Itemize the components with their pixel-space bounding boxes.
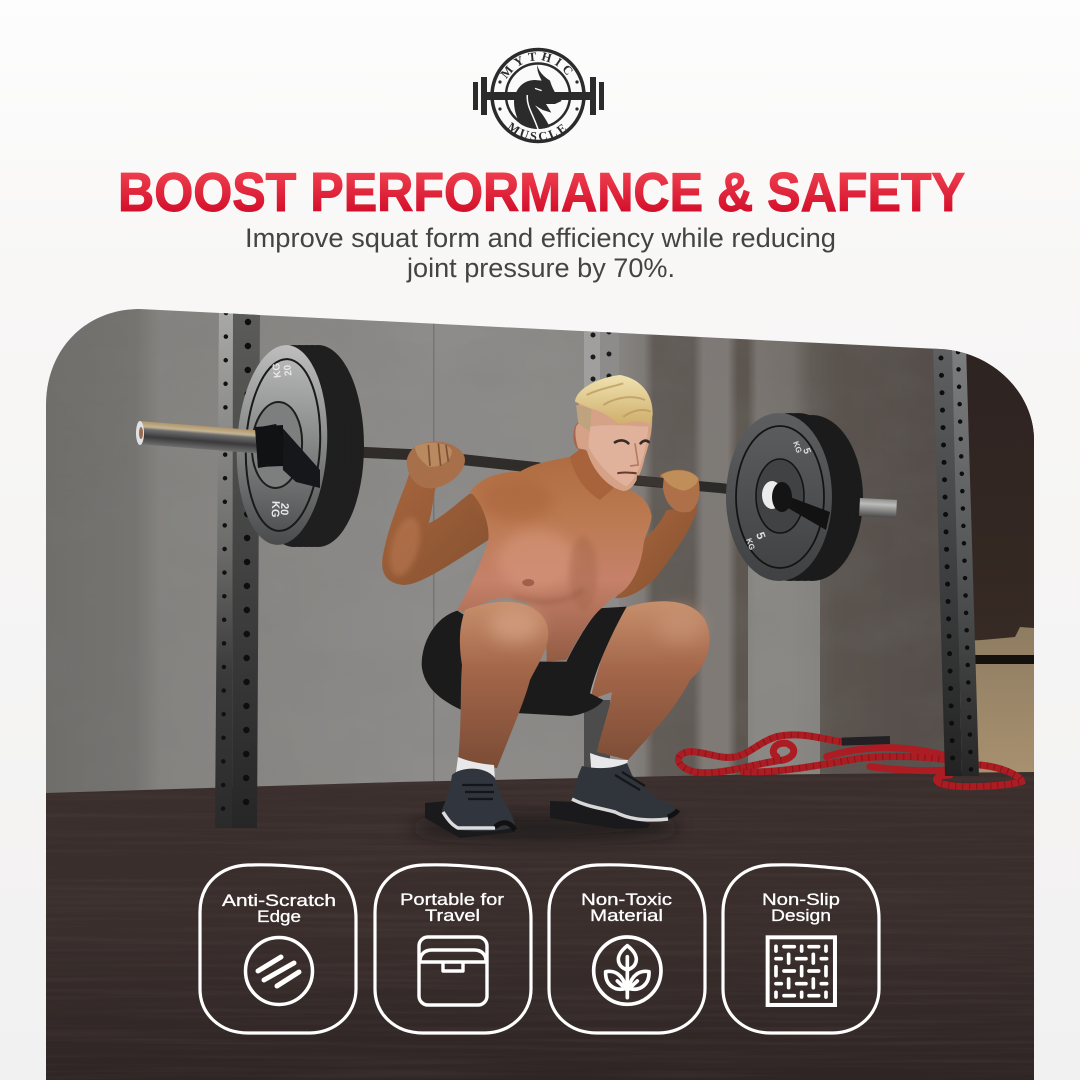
- pec underside shadow: [513, 590, 583, 602]
- neck: [570, 449, 614, 500]
- badge label: Non-Toxic: [581, 890, 673, 909]
- right weight plate 5 KG: 5: [800, 447, 813, 456]
- badge label: Travel: [425, 906, 480, 925]
- left rack upright: [215, 310, 260, 828]
- icon: circled diagonal stripes: [246, 938, 312, 1004]
- ring dots: [498, 80, 579, 111]
- barbell bar left of athlete: [355, 452, 540, 468]
- nipple: [522, 579, 534, 586]
- right weight plate 5 KG: [726, 413, 897, 581]
- right weight plate 5 KG: KG: [791, 440, 804, 454]
- face light: [588, 425, 648, 487]
- feature badge: Non-Toxic Material: [549, 865, 705, 1033]
- badge label: Material: [590, 906, 663, 925]
- chest divide shadow: [569, 537, 597, 610]
- wedge squat blocks: [425, 801, 650, 838]
- right rack upright: [933, 345, 979, 776]
- barbell plates: [473, 77, 604, 115]
- left shoe: [442, 769, 515, 831]
- right shoe: [572, 763, 678, 822]
- knee highlight: [489, 607, 541, 643]
- right leg: [590, 601, 710, 760]
- right weight plate 5 KG: KG: [744, 537, 757, 551]
- athlete: [382, 375, 710, 831]
- left weight plate 20 KG: 20: [282, 364, 295, 376]
- ear: [573, 422, 582, 450]
- right knuckles: [662, 470, 698, 491]
- torso and head: [382, 375, 700, 662]
- emblem ring: [492, 50, 584, 142]
- badge label: Anti-Scratch: [222, 891, 336, 910]
- left weight plate 20 KG: [232, 343, 364, 547]
- socks: [455, 753, 628, 780]
- panel: gym photo scene: [46, 300, 1040, 1080]
- hair strands: [587, 383, 651, 417]
- badge label: Non-Slip: [762, 890, 840, 909]
- shorts: [422, 607, 627, 716]
- icon: leaf in circle: [594, 937, 661, 1004]
- right knee highlight: [656, 607, 704, 643]
- inner emblem: [506, 64, 570, 128]
- shoulder shade: [486, 488, 548, 518]
- left weight plate 20 KG: KG: [269, 501, 281, 518]
- badge label: Design: [771, 906, 831, 925]
- icon: non-slip grip pattern: [768, 937, 835, 1005]
- arm left highlight: [390, 518, 420, 576]
- subtitle: joint pressure by 70%.: [406, 253, 675, 283]
- left knuckles: [415, 443, 452, 467]
- badge label: Portable for: [400, 890, 504, 909]
- ring lettering: MYTHIC: [500, 52, 573, 79]
- hair fade: [576, 405, 592, 432]
- badge label: Edge: [257, 907, 301, 926]
- nose: [630, 443, 638, 466]
- battle rope: [678, 735, 1022, 787]
- centre rack upright: [584, 325, 619, 785]
- title: BOOST PERFORMANCE & SAFETY: [118, 162, 965, 223]
- feature badge: Non-Slip Design: [723, 865, 879, 1033]
- storage area with cardboard box: [960, 352, 1034, 772]
- arm right: [615, 507, 698, 598]
- barbell sleeve left: [136, 421, 284, 468]
- face: [575, 404, 652, 491]
- bar across emblem: [490, 92, 591, 100]
- subtitle: [245, 223, 836, 283]
- bar in front of neck: [637, 480, 663, 483]
- left finger lines: [428, 443, 448, 466]
- left hand: [407, 442, 465, 488]
- feature badge: Anti-Scratch Edge: [200, 865, 356, 1033]
- badge label: [400, 890, 504, 925]
- badge label: [581, 890, 673, 925]
- left leg: [458, 602, 548, 768]
- eyes: [615, 440, 649, 443]
- rubber floor: [46, 770, 1034, 1080]
- mouth: [617, 469, 637, 476]
- feature badge: Portable for Travel: [375, 865, 531, 1033]
- right weight plate 5 KG: 5: [753, 530, 769, 541]
- dragon head: [514, 65, 562, 129]
- icon: travel box: [419, 937, 487, 1005]
- badge label: [762, 890, 840, 925]
- hair: [575, 375, 653, 425]
- logo: Mythic Muscle dragon barbell emblem: [473, 48, 604, 144]
- ring lettering lower: MUSCLE: [508, 122, 566, 140]
- arm left: [382, 470, 493, 585]
- right hand: [660, 470, 700, 512]
- left weight plate 20 KG: KG: [271, 362, 284, 378]
- chest highlight: [497, 530, 577, 590]
- barbell bar right of athlete: [633, 476, 727, 494]
- concrete wall: [46, 300, 1034, 800]
- subtitle: Improve squat form and efficiency while reducing: [245, 223, 836, 253]
- left weight plate 20 KG: 20: [278, 503, 290, 516]
- badge label: [222, 891, 336, 926]
- torso: [457, 457, 652, 662]
- floor shadow under athlete: [410, 816, 680, 840]
